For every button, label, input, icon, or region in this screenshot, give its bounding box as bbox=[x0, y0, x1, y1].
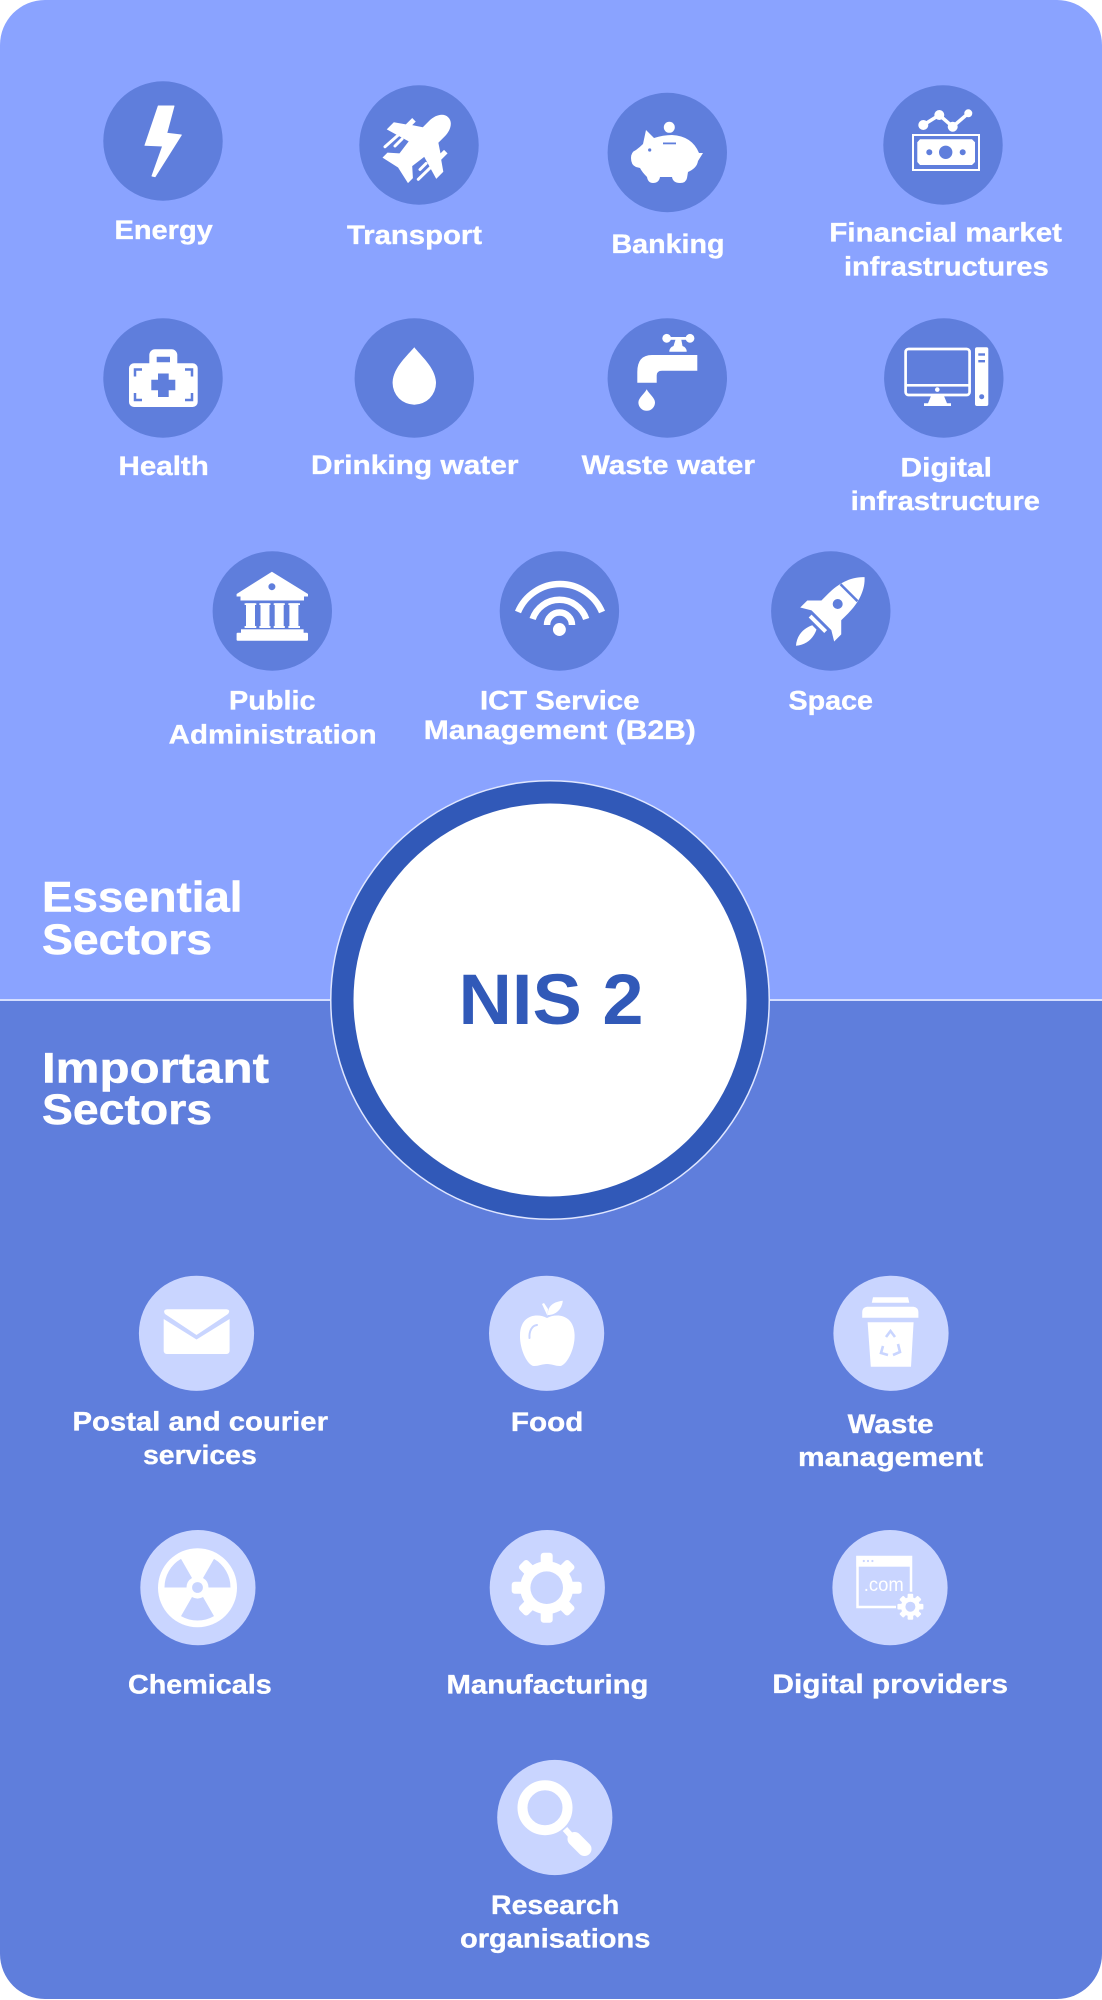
item: Chemicals bbox=[128, 1530, 272, 1700]
icon: airplane bbox=[370, 93, 473, 195]
icon: desktop computer bbox=[905, 347, 988, 406]
item: Banking bbox=[608, 93, 727, 259]
icon: medical case bbox=[129, 349, 198, 407]
icon: lightning bolt bbox=[145, 106, 181, 177]
icon: recycling bin bbox=[862, 1297, 918, 1367]
label: Research organisations bbox=[460, 1890, 650, 1954]
heading: Important Sectors: Sectors bbox=[42, 1086, 212, 1134]
item: ICT Service Management (B2B) bbox=[424, 551, 696, 745]
heading: Important Sectors bbox=[42, 1044, 269, 1134]
item: Food bbox=[489, 1276, 604, 1437]
icon: web window with gear bbox=[856, 1556, 923, 1620]
label: Digital infrastructure bbox=[851, 453, 1040, 516]
label: Waste management bbox=[798, 1409, 983, 1472]
label: Chemicals: Chemicals bbox=[128, 1670, 272, 1700]
label: Financial market infrastructures: Financial market bbox=[829, 218, 1062, 248]
heading: Essential Sectors: Essential bbox=[42, 874, 242, 922]
icon: dripping tap bbox=[637, 334, 697, 411]
icon: envelope bbox=[164, 1309, 230, 1354]
label: Waste management: Waste bbox=[848, 1409, 934, 1439]
label: Public Administration: Public bbox=[229, 686, 316, 716]
label: Digital infrastructure: infrastructure bbox=[851, 486, 1040, 516]
label: ICT Service Management (B2B) bbox=[424, 686, 696, 745]
heading: Important Sectors: Important bbox=[42, 1044, 269, 1092]
label: Space: Space bbox=[788, 686, 873, 716]
panel: essential sectors background bbox=[0, 0, 1102, 1000]
label: Financial market infrastructures: infrastructures bbox=[844, 252, 1049, 282]
label: Research organisations: Research bbox=[491, 1890, 619, 1920]
label: Energy: Energy bbox=[114, 215, 213, 245]
label: ICT Service Management (B2B): ICT Service bbox=[480, 686, 640, 716]
label: Waste management: management bbox=[798, 1442, 983, 1472]
item: Manufacturing bbox=[446, 1530, 648, 1700]
icon: gear bbox=[512, 1553, 582, 1623]
icon: institution building bbox=[237, 572, 308, 641]
label: Financial market infrastructures bbox=[829, 218, 1062, 282]
icon: piggy bank bbox=[631, 122, 703, 183]
item: Health bbox=[103, 318, 223, 481]
panel: important sectors background bbox=[0, 1000, 1102, 1999]
item: Research organisations bbox=[460, 1760, 650, 1954]
label: Postal and courier services: services bbox=[143, 1440, 257, 1470]
icon: water drop bbox=[393, 347, 436, 405]
label: Research organisations: organisations bbox=[460, 1924, 650, 1954]
label: Health: Health bbox=[118, 451, 209, 481]
label: Transport: Transport bbox=[347, 220, 482, 250]
label: Public Administration: Administration bbox=[169, 720, 377, 750]
item: Drinking water bbox=[311, 318, 519, 480]
icon: chart over banknote bbox=[913, 109, 979, 170]
item: Financial market infrastructures bbox=[829, 85, 1062, 282]
item: Postal and courier services bbox=[72, 1276, 329, 1470]
label: Postal and courier services bbox=[72, 1406, 329, 1470]
item: Waste management bbox=[798, 1276, 983, 1472]
badge title: NIS 2: NIS 2 bbox=[458, 961, 644, 1040]
item: Transport bbox=[347, 85, 482, 250]
icon: apple bbox=[520, 1301, 575, 1366]
icon: radiation symbol bbox=[158, 1548, 237, 1627]
item: Waste water bbox=[582, 318, 756, 480]
heading: Essential Sectors: Sectors bbox=[42, 916, 212, 964]
item: Energy bbox=[103, 81, 223, 245]
icon: rocket bbox=[779, 560, 882, 663]
heading: Essential Sectors bbox=[42, 874, 242, 964]
label: Banking: Banking bbox=[612, 229, 724, 259]
central NIS 2 badge bbox=[330, 780, 770, 1220]
icon: wifi signal bbox=[518, 584, 602, 633]
item: Digital providers bbox=[772, 1530, 1008, 1699]
icon text: .com: .com bbox=[864, 1575, 904, 1596]
label: Waste water: Waste water bbox=[582, 450, 756, 480]
label: Postal and courier services: Postal and courier bbox=[72, 1406, 329, 1436]
item: Digital infrastructure bbox=[851, 318, 1040, 516]
label: Digital infrastructure: Digital bbox=[900, 453, 992, 483]
label: Public Administration bbox=[169, 686, 377, 750]
label: Manufacturing: Manufacturing bbox=[446, 1670, 648, 1700]
label: Food: Food bbox=[511, 1407, 583, 1437]
item: Public Administration bbox=[169, 551, 377, 750]
label: Drinking water: Drinking water bbox=[311, 450, 519, 480]
label: ICT Service Management (B2B): Management (B2B) bbox=[424, 715, 696, 745]
icon: magnifying glass bbox=[522, 1785, 584, 1849]
item: Space bbox=[771, 551, 890, 716]
label: Digital providers: Digital providers bbox=[772, 1669, 1008, 1699]
